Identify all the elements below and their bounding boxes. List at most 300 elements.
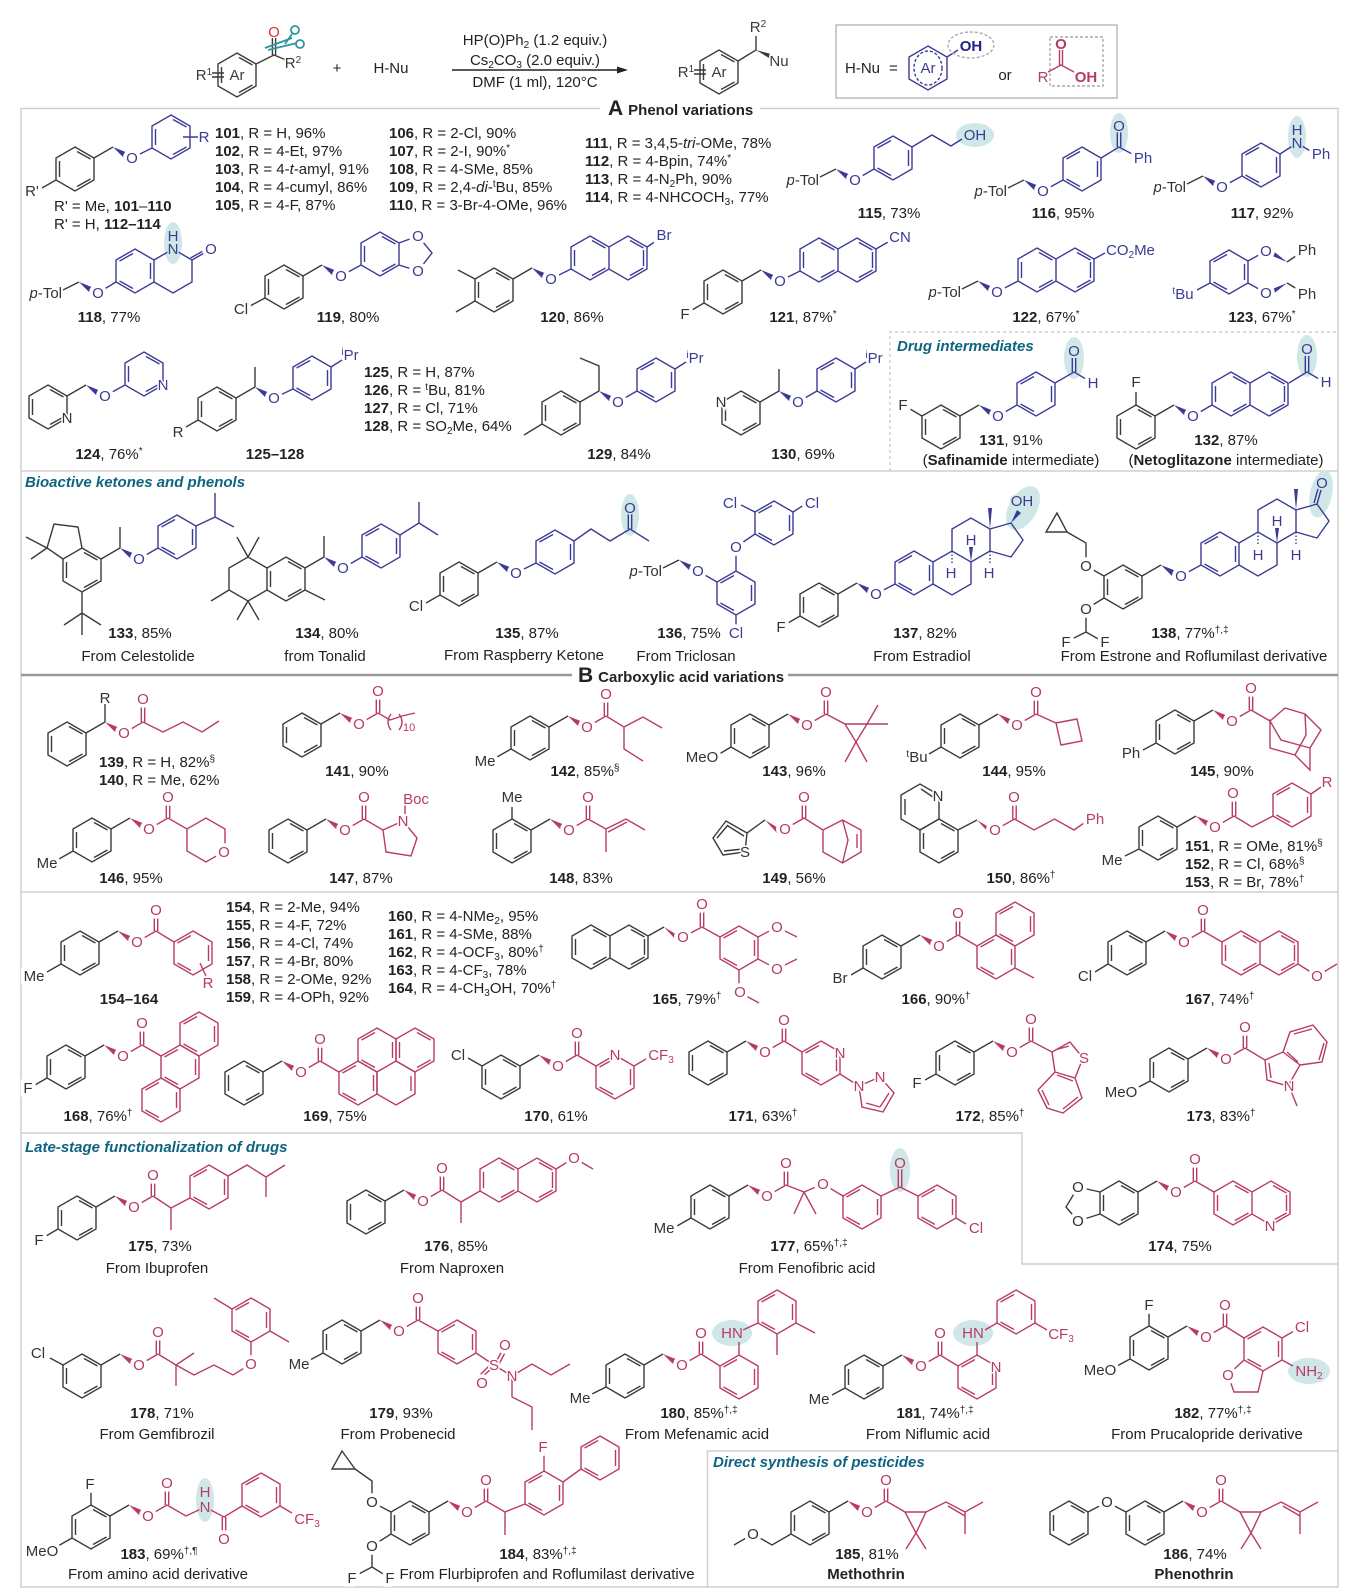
compound 135 from Raspberry Ketone: 135, 87%	[495, 625, 559, 642]
substituent list 111-114: , 77%	[730, 189, 769, 206]
compound 121: 121, 87%	[769, 309, 833, 326]
substituent list 125-128: 2	[447, 426, 453, 437]
compound 174	[1066, 1151, 1290, 1255]
compound 170: O	[552, 1058, 564, 1075]
compound 176 from Naproxen: O	[417, 1193, 429, 1210]
compounds 125-128: O	[268, 390, 280, 407]
substituent list 160-164: 162, R = 4-OCF	[388, 944, 494, 961]
substituent list 125-128: 127, R = Cl, 71%	[364, 400, 478, 417]
compound 121: *	[833, 309, 837, 320]
compound 185 Methothrin: O	[880, 1472, 892, 1489]
compound 145: O	[1245, 680, 1257, 697]
compound 144: t	[906, 749, 909, 760]
compounds 125-128: R	[173, 424, 184, 441]
compound 122: p-Tol	[927, 284, 961, 301]
compounds 125-128: i	[341, 347, 344, 358]
substituent list 106-110: Bu, 85%	[496, 179, 552, 196]
compounds 151-153: O	[1209, 819, 1221, 836]
compounds 151-153: 152, R = Cl, 68%	[1185, 856, 1299, 873]
compound 172: S	[1079, 1050, 1089, 1067]
compound 118: O	[205, 241, 217, 258]
compound 138 from Estrone and Roflumilast: From Estrone and Roflumilast derivative	[1061, 648, 1327, 665]
substituent list 111-114: 111, R = 3,4,5-tri-OMe, 78%	[585, 135, 771, 152]
compound 182 from Prucalopride	[1084, 1297, 1330, 1443]
compound 117: Ph	[1312, 146, 1330, 163]
compound 173: O	[1220, 1051, 1232, 1068]
compound 132	[1117, 335, 1331, 469]
compound 173: 173, 83%	[1187, 1108, 1250, 1125]
compound 143	[686, 684, 888, 780]
compound 146: O	[218, 844, 230, 861]
compound 171: O	[759, 1044, 771, 1061]
substituent list 111-114: *	[727, 153, 731, 164]
compound 123: Bu	[1175, 286, 1194, 303]
compound 173: MeO	[1105, 1084, 1137, 1101]
reaction arrow with conditions: 2	[488, 60, 494, 71]
compounds 139-140: O	[137, 691, 149, 708]
compound 132: 132, 87%	[1194, 432, 1258, 449]
heading: section A: A Phenol variations	[608, 97, 753, 120]
compound 181 from Niflumic acid: CF	[1048, 1326, 1068, 1343]
compound 130: i	[865, 350, 868, 361]
compound 165: †	[716, 991, 721, 1002]
compound 136 from Triclosan: From Triclosan	[636, 648, 736, 665]
compounds 101-110: R	[199, 129, 210, 146]
compound 169: O	[314, 1031, 326, 1048]
compound 150: O	[1008, 789, 1020, 806]
compound 118: 118, 77%	[78, 309, 140, 326]
compound 185 Methothrin: O	[747, 1526, 759, 1543]
reaction arrow with conditions: DMF (1 ml), 120°C	[472, 74, 598, 91]
reaction arrow with conditions: (2.0 equiv.)	[522, 52, 600, 69]
compound 136 from Triclosan	[628, 495, 819, 665]
compound 120: Br	[656, 227, 672, 244]
compound 178 from Gemfibrozil: From Gemfibrozil	[99, 1426, 215, 1443]
compound 174: O	[1072, 1179, 1084, 1196]
compound 120: O	[545, 271, 557, 288]
compounds 154-164: O	[150, 902, 162, 919]
compound 148: Me	[502, 789, 522, 806]
compounds 125-128: 125–128	[246, 446, 304, 463]
substituent list 111-114: 113, R = 4-N	[585, 171, 670, 188]
compounds 151-153: O	[1227, 785, 1239, 802]
compound 143: O	[820, 684, 832, 701]
compound 115	[785, 123, 994, 222]
compound 170: O	[571, 1025, 583, 1042]
compound 170: N	[610, 1047, 620, 1064]
compound 123	[1172, 242, 1316, 326]
compound 173: O	[1239, 1019, 1251, 1036]
compound 142: O	[600, 686, 612, 703]
compound 183 from amino acid derivative: CF	[294, 1511, 314, 1528]
compound 132: O	[1301, 341, 1313, 358]
compound 115: OH	[964, 127, 986, 144]
compound 184 from Flurbiprofen and Roflumilast: From Flurbiprofen and Roflumilast derivative	[399, 1566, 695, 1583]
compound 122: O	[991, 284, 1003, 301]
compound 130: 130, 69%	[771, 446, 835, 463]
compound 182 from Prucalopride: From Prucalopride derivative	[1111, 1426, 1303, 1443]
compound 130: N	[716, 394, 726, 411]
compound 177 from Fenofibric acid: From Fenofibric acid	[739, 1260, 875, 1277]
compound 181 from Niflumic acid: Me	[809, 1391, 829, 1408]
compound 167: O	[1311, 968, 1323, 985]
compound 146: Me	[37, 855, 57, 872]
compound 186 Phenothrin: Phenothrin	[1154, 1566, 1234, 1583]
compound 150: 150, 86%	[987, 870, 1050, 887]
starting ketone: R	[285, 55, 296, 72]
reaction arrow with conditions: (1.2 equiv.)	[529, 32, 607, 49]
compound 138 from Estrone and Roflumilast: F	[1100, 634, 1110, 651]
compound 184 from Flurbiprofen and Roflumilast: †,‡	[563, 1546, 577, 1557]
compound 172	[912, 1011, 1089, 1125]
compound 181 from Niflumic acid: 3	[1068, 1334, 1074, 1345]
compound 177 from Fenofibric acid: O	[894, 1155, 906, 1172]
compound 122: CO	[1106, 242, 1128, 259]
compound 131	[898, 337, 1099, 469]
compound 124: O	[99, 388, 111, 405]
compound 175 from Ibuprofen: O	[147, 1167, 159, 1184]
compound 137 from Estradiol: From Estradiol	[873, 648, 971, 665]
compound 168: F	[23, 1080, 33, 1097]
compounds 151-153: R	[1322, 774, 1333, 791]
compound 182 from Prucalopride: 182, 77%	[1174, 1405, 1238, 1422]
substituent list 160-164: , 78%	[488, 962, 527, 979]
compound 122: 2	[1128, 250, 1134, 261]
compound 141: 141, 90%	[325, 763, 389, 780]
substituent list 106-110: 108, R = 4-SMe, 85%	[389, 161, 533, 178]
compound 146	[37, 789, 230, 887]
substituent list 111-114: 3	[725, 197, 731, 208]
substituent list 106-110: 110, R = 3-Br-4-OMe, 96%	[389, 197, 567, 214]
compound 166: Br	[832, 970, 848, 987]
compounds 154-164: O	[131, 934, 143, 951]
compound 166: O	[952, 905, 964, 922]
compound 180 from Mefenamic acid: From Mefenamic acid	[625, 1426, 769, 1443]
compound 180 from Mefenamic acid: HN	[721, 1325, 743, 1342]
compound 177 from Fenofibric acid: O	[780, 1155, 792, 1172]
compound 138 from Estrone and Roflumilast: H	[1291, 547, 1301, 564]
compound 131: H	[1088, 375, 1098, 392]
compound 129: i	[686, 350, 689, 361]
substituent list 160-164: 2	[494, 916, 500, 927]
compound 131: 131, 91%	[979, 432, 1043, 449]
product: 1	[689, 64, 695, 75]
compound 117: H	[1292, 122, 1302, 139]
compounds 101-110: R'	[25, 183, 39, 200]
compound 116: Ph	[1134, 150, 1152, 167]
compound 180 from Mefenamic acid: Me	[570, 1390, 590, 1407]
compound 174: O	[1072, 1213, 1084, 1230]
compound 177 from Fenofibric acid: Cl	[969, 1220, 983, 1237]
compound 145	[1122, 680, 1321, 780]
compound 121: O	[774, 273, 786, 290]
compound 172: O	[1006, 1044, 1018, 1061]
compound 183 from amino acid derivative: MeO	[26, 1543, 58, 1560]
compound 147	[269, 789, 429, 887]
compound 131: O	[992, 408, 1004, 425]
compound 141	[283, 683, 415, 780]
compound 138 from Estrone and Roflumilast: O	[1080, 558, 1092, 575]
compound 132: (Netoglitazone intermediate)	[1128, 452, 1324, 469]
compound 181 from Niflumic acid: HN	[962, 1325, 984, 1342]
compound 165: O	[677, 929, 689, 946]
compound 143: O	[801, 717, 813, 734]
compound 179 from Probenecid: O	[499, 1337, 511, 1354]
heading: late-stage functionalization: Late-stage functionalization of drugs	[25, 1139, 288, 1156]
compound 121	[680, 229, 911, 326]
compound 137 from Estradiol: H	[966, 532, 976, 549]
compound 184 from Flurbiprofen and Roflumilast: F	[538, 1439, 548, 1456]
compounds 151-153	[1102, 774, 1333, 891]
compound 166	[832, 902, 1034, 1008]
compounds 139-140: O	[118, 725, 130, 742]
compounds 154-164: Me	[24, 968, 44, 985]
substituent list 154-159	[226, 899, 372, 1006]
compound 174: O	[1189, 1151, 1201, 1168]
compound 172: O	[1025, 1011, 1037, 1028]
compound 123: Ph	[1298, 242, 1316, 259]
compound 182 from Prucalopride: NH	[1295, 1363, 1317, 1380]
compound 150: †	[1050, 870, 1055, 881]
starting ketone: 2	[296, 55, 302, 66]
substituent list 111-114: 2	[670, 179, 676, 190]
starting ketone	[196, 24, 302, 97]
compound 119: O	[412, 228, 424, 245]
compound 182 from Prucalopride: †,‡	[1238, 1405, 1252, 1416]
compound 177 from Fenofibric acid: O	[761, 1188, 773, 1205]
compound 169: 169, 75%	[303, 1108, 367, 1125]
compound 171: †	[792, 1108, 797, 1119]
compound 168: O	[136, 1015, 148, 1032]
compound 169: O	[295, 1064, 307, 1081]
compound 180 from Mefenamic acid: O	[676, 1357, 688, 1374]
compound 185 Methothrin: Methothrin	[827, 1566, 905, 1583]
H-Nu definition box: or	[998, 67, 1012, 84]
substituent list 160-164: †	[538, 944, 544, 955]
compound 115: p-Tol	[785, 172, 819, 189]
substituent list 154-159: 157, R = 4-Br, 80%	[226, 953, 353, 970]
compound 137 from Estradiol	[776, 480, 1047, 665]
compound 130	[716, 350, 883, 463]
compound 179 from Probenecid: From Probenecid	[340, 1426, 456, 1443]
substituent list 160-164: 3	[484, 988, 490, 999]
compound 135 from Raspberry Ketone: O	[624, 500, 636, 517]
compound 176 from Naproxen: O	[568, 1150, 580, 1167]
heading: drug intermediates: Drug intermediates	[897, 338, 1034, 355]
substituent list 154-159: 156, R = 4-Cl, 74%	[226, 935, 353, 952]
compound 147: 147, 87%	[329, 870, 393, 887]
compounds 151-153: 153, R = Br, 78%	[1185, 874, 1299, 891]
compound 137 from Estradiol: O	[870, 586, 882, 603]
compounds 151-153: †	[1299, 874, 1304, 885]
compound 148	[493, 789, 645, 887]
compound 146: O	[162, 789, 174, 806]
compound 141: O	[372, 683, 384, 700]
compound 180 from Mefenamic acid: O	[695, 1325, 707, 1342]
compound 179 from Probenecid: S	[489, 1357, 499, 1374]
compound 170: Cl	[451, 1047, 465, 1064]
substituent list 101-105: 104, R = 4-cumyl, 86%	[215, 179, 367, 196]
general reaction scheme	[196, 19, 1117, 98]
compounds 101-110	[25, 115, 210, 233]
compound 170: CF	[648, 1047, 668, 1064]
compound 185 Methothrin	[734, 1472, 983, 1583]
H-Nu definition box: =	[889, 60, 898, 77]
compound 167: 167, 74%	[1186, 991, 1249, 1008]
compound 144: Bu	[909, 749, 928, 766]
compound 134 from Tonalid: O	[337, 560, 349, 577]
compound 182 from Prucalopride: O	[1200, 1329, 1212, 1346]
substituent list 106-110: 109, R = 2,4-di-	[389, 179, 493, 196]
compound 186 Phenothrin: O	[1196, 1504, 1208, 1521]
compound 184 from Flurbiprofen and Roflumilast: O	[366, 1538, 378, 1555]
compound 179 from Probenecid	[289, 1290, 570, 1443]
compounds 151-153: §	[1317, 838, 1323, 849]
compound 115: O	[849, 172, 861, 189]
compound 175 from Ibuprofen	[34, 1165, 285, 1277]
substituent list 160-164: , 80%	[500, 944, 538, 961]
compound 184 from Flurbiprofen and Roflumilast: 184, 83%	[499, 1546, 563, 1563]
compound 120	[456, 227, 672, 326]
heading: section B: B Carboxylic acid variations	[578, 664, 784, 687]
substituent list 106-110	[389, 125, 567, 214]
substituent list 160-164: 3	[483, 970, 489, 981]
compound 117	[1152, 116, 1330, 222]
compound 129: 129, 84%	[587, 446, 651, 463]
compound 184 from Flurbiprofen and Roflumilast: O	[461, 1504, 473, 1521]
compound 150	[901, 784, 1104, 887]
product	[678, 19, 789, 94]
substituent list 111-114: 114, R = 4-NHCOCH	[585, 189, 725, 206]
substituent list 125-128	[364, 364, 512, 437]
compound 177 from Fenofibric acid: †,‡	[834, 1238, 848, 1249]
substituent list 160-164: 160, R = 4-NMe	[388, 908, 494, 925]
substituent list 101-105: 105, R = 4-F, 87%	[215, 197, 336, 214]
compound 147: N	[398, 813, 408, 830]
compound 137 from Estradiol: 137, 82%	[893, 625, 957, 642]
plus and nucleophile: +	[333, 60, 341, 77]
compound 116	[973, 113, 1152, 222]
compound 136 from Triclosan: p-Tol	[628, 563, 662, 580]
compound 171: 171, 63%	[729, 1108, 792, 1125]
compound 177 from Fenofibric acid: 177, 65%	[770, 1238, 834, 1255]
substituent list 160-164: 164, R = 4-CH	[388, 980, 484, 997]
substituent list 125-128: 125, R = H, 87%	[364, 364, 474, 381]
compound 183 from amino acid derivative: N	[200, 1499, 210, 1516]
compound 183 from amino acid derivative: 3	[314, 1519, 320, 1530]
compound 181 from Niflumic acid: O	[915, 1358, 927, 1375]
compound 124: 124, 76%	[75, 446, 139, 463]
compound 148: O	[582, 789, 594, 806]
H-Nu definition box: Ar	[920, 60, 936, 77]
compound 179 from Probenecid: O	[476, 1375, 488, 1392]
compounds 125-128	[173, 347, 359, 463]
compound 185 Methothrin: 185, 81%	[835, 1546, 899, 1563]
compound 135 from Raspberry Ketone: O	[510, 565, 522, 582]
compound 130: Pr	[868, 350, 883, 367]
compound 168: O	[117, 1048, 129, 1065]
substituent list 101-105: 103, R = 4-t-amyl, 91%	[215, 161, 369, 178]
compound 146: 146, 95%	[99, 870, 163, 887]
compound 138 from Estrone and Roflumilast: H	[1272, 513, 1282, 530]
compound 168: †	[127, 1108, 132, 1119]
compound 172: 172, 85%	[956, 1108, 1019, 1125]
compounds 139-140: R	[100, 690, 111, 707]
compound 183 from amino acid derivative: O	[142, 1508, 154, 1525]
compound 137 from Estradiol: H	[984, 565, 994, 582]
compound 180 from Mefenamic acid: †,‡	[724, 1405, 738, 1416]
compound 165: O	[734, 984, 746, 1001]
compound 183 from amino acid derivative: †,¶	[184, 1546, 198, 1557]
substituent list 160-164: 3	[494, 952, 500, 963]
compound 133 from Celestolide: From Celestolide	[81, 648, 195, 665]
compound 183 from amino acid derivative: H	[200, 1484, 210, 1501]
compound 185 Methothrin: O	[861, 1504, 873, 1521]
compound 186 Phenothrin: O	[1101, 1494, 1113, 1511]
compound 138 from Estrone and Roflumilast: 138, 77%	[1151, 625, 1215, 642]
compound 129	[524, 350, 704, 463]
compound 122	[927, 242, 1155, 326]
substituent list 106-110: 106, R = 2-Cl, 90%	[389, 125, 516, 142]
compound 181 from Niflumic acid	[809, 1290, 1074, 1443]
compounds 125-128: Pr	[344, 347, 359, 364]
compound 119: O	[412, 263, 424, 280]
compound 167: O	[1197, 902, 1209, 919]
starting ketone: 1	[207, 67, 213, 78]
compound 170: 170, 61%	[524, 1108, 588, 1125]
compound 136 from Triclosan: O	[730, 539, 742, 556]
compounds 151-153: 151, R = OMe, 81%	[1185, 838, 1317, 855]
compound 183 from amino acid derivative: From amino acid derivative	[68, 1566, 248, 1583]
compound 173	[1105, 1019, 1327, 1125]
compound 183 from amino acid derivative: 183, 69%	[120, 1546, 184, 1563]
substituent list 125-128: Bu, 81%	[428, 382, 485, 399]
compound 176 from Naproxen: O	[436, 1160, 448, 1177]
H-Nu definition box: R	[1038, 69, 1049, 86]
compound 168: 168, 76%	[64, 1108, 127, 1125]
compound 147: O	[358, 789, 370, 806]
substituent list 160-164: OH, 70%	[490, 980, 551, 997]
substituent list 160-164: †	[551, 980, 556, 991]
reaction arrow with conditions: 3	[516, 60, 522, 71]
product: Ar	[712, 64, 727, 81]
compound 169	[225, 1028, 434, 1125]
compound 122: *	[1076, 309, 1080, 320]
compound 167: O	[1178, 934, 1190, 951]
compound 142	[475, 686, 662, 780]
compound 147: O	[339, 822, 351, 839]
compound 118: N	[168, 241, 178, 258]
compound 167: Cl	[1078, 968, 1092, 985]
compound 181 from Niflumic acid: N	[991, 1359, 1001, 1376]
compounds 154-164: 154–164	[100, 991, 159, 1008]
compound 115: 115, 73%	[858, 205, 920, 222]
compound 138 from Estrone and Roflumilast: H	[1253, 547, 1263, 564]
compound 131: O	[1068, 343, 1080, 360]
starting ketone: Ar	[230, 67, 245, 84]
substituent list 160-164: 163, R = 4-CF	[388, 962, 483, 979]
compound 134 from Tonalid	[211, 502, 438, 665]
compound 178 from Gemfibrozil	[31, 1298, 289, 1443]
reaction arrow with conditions	[452, 32, 628, 91]
substituent list 125-128: t	[425, 382, 428, 393]
compound 182 from Prucalopride: O	[1219, 1297, 1231, 1314]
compound 124	[29, 352, 168, 463]
compound 181 from Niflumic acid: O	[934, 1325, 946, 1342]
compound 124: N	[62, 410, 72, 427]
compound 178 from Gemfibrozil: O	[152, 1324, 164, 1341]
compound 176 from Naproxen: 176, 85%	[424, 1238, 488, 1255]
